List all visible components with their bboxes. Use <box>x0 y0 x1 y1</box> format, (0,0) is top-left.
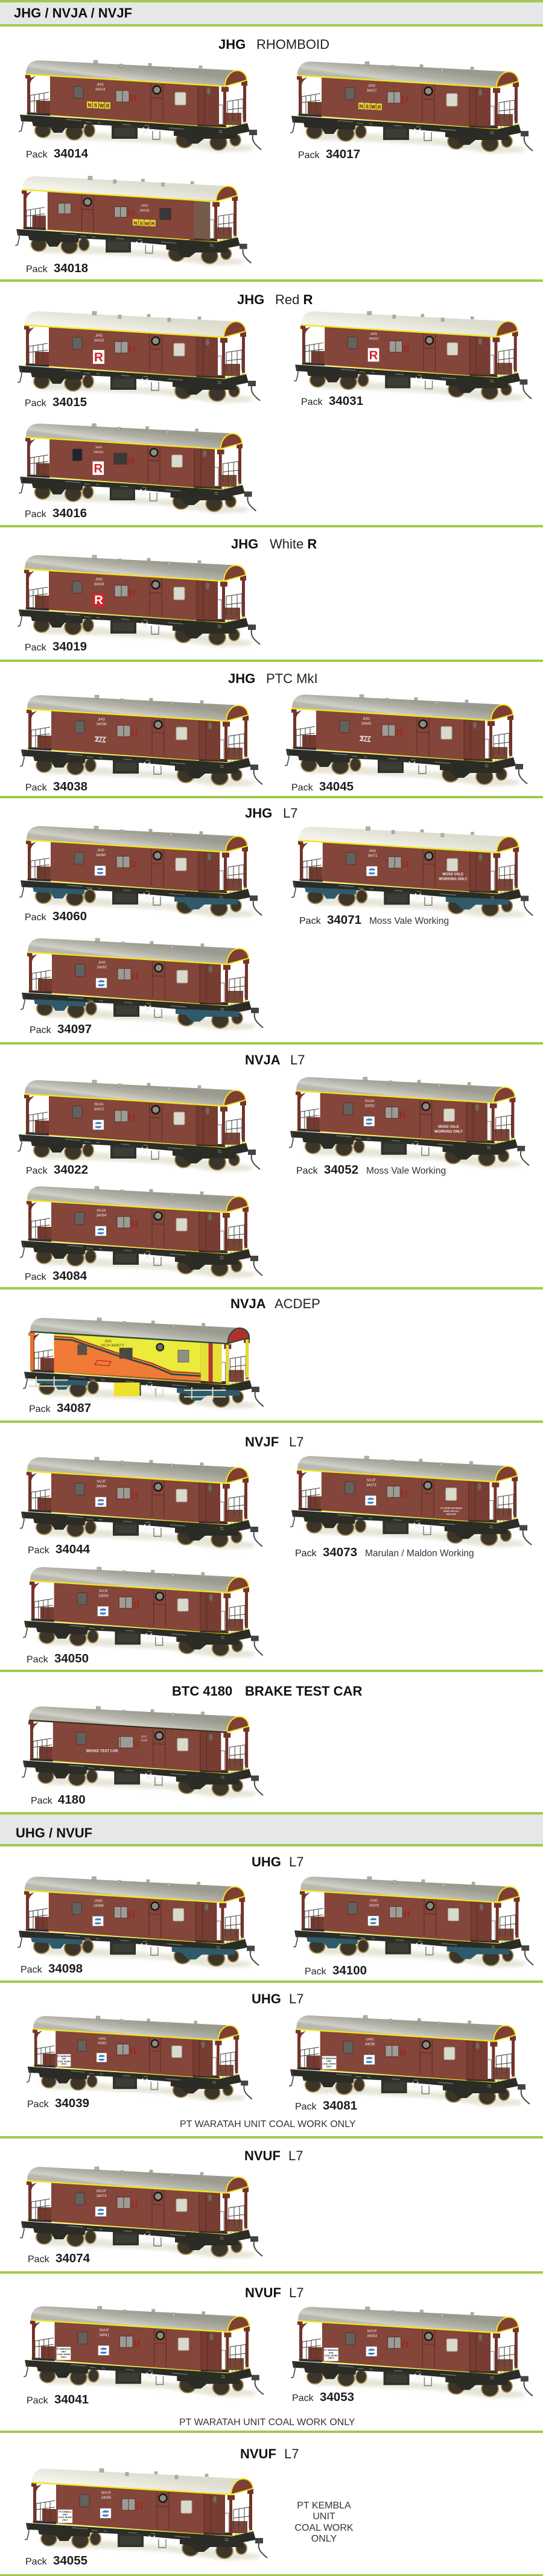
wagon 34074 <box>20 2167 262 2259</box>
pack label 34014: Pack <box>26 150 48 160</box>
pack label 34087: Pack <box>29 1404 51 1414</box>
pack label 34081: 34081 <box>323 2099 357 2113</box>
heading: JHG White R: White <box>270 536 307 552</box>
header band: JHG / NVJA / NVJF: JHG / NVJA / NVJF <box>14 5 132 21</box>
wagon 34031: JHG <box>370 332 378 336</box>
pack label 34071: 34071 <box>327 913 361 927</box>
heading: JHG RHOMBOID: RHOMBOID <box>256 37 329 52</box>
wagon 34041 <box>24 2306 264 2397</box>
header band: UHG / NVUF: UHG / NVUF <box>16 1825 92 1840</box>
wagon 34038 <box>20 695 262 787</box>
heading: JHG White R: JHG <box>231 536 258 552</box>
wagon 34055: 34055 <box>101 2496 112 2500</box>
wagon 34041: UNIT <box>61 2351 66 2353</box>
wagon 34052: MOSS VALE <box>438 1125 459 1129</box>
wagon 34039: 34081 <box>98 2042 107 2046</box>
wagon 34014: JHG <box>97 83 104 87</box>
wagon 34039: COAL WORK <box>58 2060 71 2062</box>
wagon 34087: NVJA 34087 F <box>101 1344 124 1348</box>
pack label 34074: 34074 <box>56 2251 91 2265</box>
wagon 34039: PT WARATAH <box>57 2055 71 2058</box>
wagon 34074: NVUF <box>97 2190 106 2193</box>
wagon 34018: R <box>151 221 155 226</box>
pack label 34015: Pack <box>25 398 46 409</box>
heading: NVUF L7: L7 <box>288 2148 303 2163</box>
pack label 34084: Pack <box>25 1272 46 1282</box>
wagon 34100: 34100 <box>369 1904 379 1907</box>
wagon 34017: JHG <box>368 84 375 88</box>
pack label 34044: Pack <box>28 1545 49 1556</box>
wagon 34074: 34074 <box>97 2195 107 2198</box>
pack label 34071: Pack <box>299 916 321 926</box>
wagon 34019: R <box>94 594 103 607</box>
pack label 34041: Pack <box>27 2396 48 2406</box>
wagon 34081: UHG <box>366 2038 374 2042</box>
wagon 34050: 34050 <box>98 1594 109 1598</box>
pack label 34052: Pack <box>296 1166 318 1176</box>
pack label 34038: 34038 <box>53 780 87 793</box>
wagon 34060: 34060 <box>96 854 106 857</box>
wagon 34017: W <box>371 104 376 110</box>
heading: NVJF L7: L7 <box>289 1434 303 1449</box>
wagon 34039: ONLY <box>62 2062 67 2065</box>
wagon 34055 <box>25 2469 267 2560</box>
wagon 34084: NVJA <box>97 1209 106 1213</box>
wagon 34039: UNIT <box>62 2058 66 2060</box>
wagon 34014: W <box>100 103 104 109</box>
wagon 34071 <box>291 827 533 918</box>
wagon 34098: UHG <box>95 1900 103 1903</box>
wagon 34081: 34039 <box>365 2043 375 2047</box>
wagon 34060: JHG <box>97 849 104 853</box>
pack label 34039: 34039 <box>55 2096 89 2110</box>
pack label 4180: 4180 <box>58 1793 86 1807</box>
wagon 34016: JHG <box>95 446 103 450</box>
heading: NVJA L7: NVJA <box>245 1052 281 1067</box>
wagon 34081 <box>289 2015 530 2107</box>
heading: UHG L7: UHG <box>252 1854 281 1869</box>
wagon 34041: 34041 <box>99 2333 109 2337</box>
heading: UHG L7: L7 <box>289 1854 303 1869</box>
panel: JHG PTC MkI <box>20 671 527 793</box>
wagon 34084: 34084 <box>97 1214 107 1218</box>
panel: NVUF L7 Pt Waratah <box>24 2285 533 2428</box>
pack label 34100: 34100 <box>332 1964 367 1977</box>
wagon 34017: 34017 <box>367 89 377 93</box>
pack label 34015: 34015 <box>52 395 87 409</box>
wagon 4180 <box>22 1706 263 1798</box>
wagon 34052: NVJA <box>365 1100 374 1104</box>
heading: NVUF L7: NVUF <box>240 2446 276 2461</box>
wagon 34053 <box>291 2307 533 2399</box>
wagon 34098 <box>17 1877 259 1968</box>
heading: NVJA ACDEP: ACDEP <box>275 1296 320 1311</box>
wagon 34014: N <box>88 103 92 108</box>
wagon 34060 <box>19 826 262 918</box>
panel: NVUF L7 <box>20 2148 303 2265</box>
panel: NVJA L7 <box>17 1052 529 1283</box>
wagon 34052: 34052 <box>365 1104 375 1108</box>
heading: UHG L7: L7 <box>289 1991 303 2006</box>
wagon 34045: 34045 <box>361 722 372 726</box>
pack label 34019: Pack <box>25 643 46 653</box>
wagon 34055: ONLY <box>62 2519 68 2521</box>
panel: NVJF L7 <box>20 1434 532 1665</box>
note: PT Kembla unit coal work only: PT KEMBLA <box>297 2501 351 2511</box>
wagon 34055: COAL WORK <box>59 2516 72 2519</box>
heading: JHG Red R: JHG <box>237 292 264 307</box>
panel: JHG Red R <box>17 292 532 520</box>
pack label 34018: 34018 <box>54 261 88 275</box>
wagon 34014: S <box>94 103 98 109</box>
note: PT Kembla unit coal work only: UNIT <box>313 2511 335 2522</box>
wagon 34073: MARULAN and <box>443 1510 459 1513</box>
pack label 34055: 34055 <box>53 2554 87 2568</box>
wagon 34015: JHG <box>95 334 103 338</box>
wagon 34071: 34071 <box>367 854 378 858</box>
heading: JHG White R: R <box>307 536 317 552</box>
wagon 34041: COAL WORK <box>57 2353 71 2356</box>
heading: JHG PTC MkI: JHG <box>228 671 255 686</box>
heading: JHG Red R: R <box>303 292 313 307</box>
pack label 34053: 34053 <box>320 2390 354 2404</box>
note: PT Waratah unit coal work only: PT WARATAH UNIT COAL WORK ONLY <box>180 2119 356 2129</box>
wagon 34015: 34015 <box>94 339 104 343</box>
note: PT Kembla unit coal work only: ONLY <box>311 2534 337 2544</box>
wagon 34044: NVJF <box>97 1480 106 1484</box>
heading: NVUF L7: NVUF <box>244 2148 281 2163</box>
heading: JHG RHOMBOID: JHG <box>218 37 246 52</box>
pack label 34022: Pack <box>26 1166 48 1176</box>
panel: UHG L7 blue bogies <box>17 1854 533 1977</box>
pack label 34031: 34031 <box>329 394 363 408</box>
heading: JHG L7: JHG <box>245 806 272 821</box>
wagon 34055: UNIT <box>63 2514 68 2516</box>
heading: UHG L7: UHG <box>252 1991 281 2006</box>
wagon 34081: ONLY <box>326 2066 332 2068</box>
pack label 34087: 34087 <box>57 1401 91 1415</box>
pack label 34050: Pack <box>27 1655 48 1665</box>
note: PT Waratah unit coal work only: PT WARATAH UNIT COAL WORK ONLY <box>179 2417 355 2428</box>
wagon 34018: N <box>133 220 137 226</box>
wagon 34018: 34018 <box>139 209 149 212</box>
heading: BTC 4180 BRAKE TEST CAR: BRAKE TEST CAR <box>245 1684 362 1699</box>
wagon 34018: W <box>145 221 150 226</box>
pack label 34074: Pack <box>28 2254 49 2265</box>
pack label 34045: Pack <box>291 783 313 793</box>
wagon 34071: WORKING ONLY <box>439 878 467 882</box>
wagon 34016 <box>19 424 256 514</box>
wagon 34084 <box>20 1186 262 1278</box>
wagon 34097: 34097 <box>97 966 107 970</box>
wagon 34044 <box>20 1457 262 1549</box>
wagon 34015 <box>17 311 260 403</box>
wagon 34087 <box>23 1318 264 1409</box>
pack label 34014: 34014 <box>54 147 89 161</box>
panel: NVUF L7 Pt Kembla <box>25 2446 354 2568</box>
heading: NVJA L7: L7 <box>290 1052 305 1067</box>
pack label 34100: Pack <box>305 1967 326 1977</box>
pack label 34098: 34098 <box>48 1962 83 1976</box>
heading: NVUF L7: L7 <box>284 2446 299 2461</box>
wagon 34053: COAL WORK <box>325 2355 338 2357</box>
wagon 34017 <box>290 62 533 153</box>
wagon 34017: S <box>366 104 369 110</box>
pack label 34031: Pack <box>301 397 323 407</box>
wagon 34031: 34031 <box>369 337 379 341</box>
wagon 34053: UNIT <box>329 2352 334 2354</box>
heading: NVUF L7: NVUF <box>245 2285 281 2300</box>
wagon 34017: N <box>360 104 363 109</box>
wagon 34016: R <box>94 462 103 475</box>
wagon 34022 <box>17 1080 260 1172</box>
wagon 34041: ONLY <box>61 2356 67 2359</box>
wagon 34050 <box>23 1567 263 1658</box>
wagon 34097: JHG <box>98 961 106 965</box>
pack label 34045: 34045 <box>319 780 354 793</box>
panel: NVJA ACDEP <box>23 1296 320 1415</box>
wagon 34019: JHG <box>95 578 103 582</box>
heading: JHG PTC MkI: PTC MkI <box>266 671 318 686</box>
panel: UHG L7 Pt Waratah <box>27 1991 530 2129</box>
pack label 34016: 34016 <box>52 506 87 520</box>
wagon 34097 <box>21 938 263 1030</box>
wagon 34053: 34053 <box>367 2335 378 2338</box>
heading: BTC 4180 BRAKE TEST CAR: BTC 4180 <box>172 1684 232 1699</box>
pack label 34016: Pack <box>25 509 46 520</box>
pack label 34039: Pack <box>27 2099 49 2110</box>
pack label 34022: 34022 <box>54 1163 88 1177</box>
header band: JHG / NVJA / NVJF <box>0 0 543 27</box>
heading: NVJF L7: NVJF <box>245 1434 279 1449</box>
wagon 34081: PT WARATAH <box>322 2057 337 2059</box>
pack label 34060: Pack <box>25 912 46 923</box>
pack label 34073: 34073 <box>323 1545 357 1559</box>
wagon 34073: NVJF <box>367 1479 376 1483</box>
header band: UHG / NVUF <box>0 1812 543 1846</box>
wagon 4180: BRAKE TEST CAR <box>86 1750 118 1754</box>
wagon 34039 <box>27 2016 252 2101</box>
panel: JHG RHOMBOID <box>15 37 533 275</box>
pack label 34073: Pack <box>295 1548 317 1559</box>
wagon 34053: PT WARATAH <box>324 2349 338 2352</box>
pack label 34060: 34060 <box>52 909 87 923</box>
note: Moss Vale Working: Moss Vale Working <box>366 1166 446 1176</box>
heading: JHG Red R: Red <box>275 292 303 307</box>
wagon 34019 <box>17 555 260 647</box>
note: PT Kembla unit coal work only: COAL WORK <box>294 2523 354 2533</box>
pack label 34017: Pack <box>298 150 320 161</box>
wagon 34014 <box>19 60 261 152</box>
wagon 34014: R <box>106 104 110 109</box>
wagon 34052: WORKING ONLY <box>434 1130 463 1134</box>
wagon 34081: UNIT <box>326 2060 332 2062</box>
pack label 34044: 34044 <box>56 1542 91 1556</box>
wagon 34053: NVUF <box>367 2330 377 2333</box>
pack label 34055: Pack <box>25 2557 47 2567</box>
wagon 34031 <box>294 311 532 401</box>
pack label 34097: Pack <box>30 1025 51 1035</box>
panel: JHG L7 <box>19 806 533 1036</box>
wagon 34071: MOSS VALE <box>442 873 463 877</box>
heading: JHG L7: L7 <box>283 806 297 821</box>
wagon 34073: 34073 <box>366 1484 376 1487</box>
wagon 34098: 34098 <box>94 1904 104 1908</box>
note: Moss Vale Working: Moss Vale Working <box>369 916 449 926</box>
note: Marulan / Maldon Working: Marulan / Maldon Working <box>365 1548 474 1559</box>
wagon 34014: 34014 <box>95 88 106 92</box>
heading: NVJA ACDEP: NVJA <box>230 1296 266 1311</box>
pack label 34098: Pack <box>21 1965 42 1975</box>
pack label 34019: 34019 <box>52 640 87 654</box>
wagon 34041: PT WARATAH <box>57 2348 71 2350</box>
wagon 34073: MALDON <box>446 1513 456 1516</box>
pack label 4180: Pack <box>31 1796 52 1806</box>
wagon 34050: NVJF <box>99 1590 108 1594</box>
wagon 34018: JHG <box>141 205 148 208</box>
wagon 34015: R <box>94 351 103 364</box>
wagon 34016: 34016 <box>94 451 103 454</box>
heading: NVUF L7: L7 <box>289 2285 303 2300</box>
wagon 34018 <box>15 176 251 266</box>
wagon 34053: ONLY <box>328 2357 334 2359</box>
pack label 34041: 34041 <box>54 2393 89 2406</box>
wagon 34081: COAL WORK <box>322 2062 336 2065</box>
pack label 34017: 34017 <box>326 147 360 161</box>
panel: JHG White R <box>17 536 317 654</box>
wagon 34019: 34019 <box>94 583 104 587</box>
wagon 34045 <box>285 695 527 786</box>
wagon 34044: 34044 <box>97 1485 107 1489</box>
pack label 34081: Pack <box>295 2102 317 2112</box>
wagon 34073 <box>290 1456 532 1547</box>
panel: BTC 4180 Brake Test Car <box>22 1684 362 1807</box>
pack label 34084: 34084 <box>52 1269 87 1283</box>
wagon 34045: JHG <box>363 717 370 721</box>
pack label 34053: Pack <box>292 2393 314 2403</box>
wagon 34022: NVJA <box>94 1103 104 1107</box>
wagon 34038: JHG <box>98 718 105 722</box>
pack label 34050: 34050 <box>54 1652 89 1665</box>
wagon 4180: BTC <box>141 1735 147 1739</box>
wagon 34031: R <box>369 348 378 362</box>
pack label 34097: 34097 <box>57 1022 92 1036</box>
wagon 34087: JHG <box>104 1340 112 1344</box>
wagon 34100: UHG <box>370 1900 378 1903</box>
wagon 34052 <box>289 1077 529 1168</box>
wagon 34017: R <box>378 105 381 110</box>
wagon 34018: S <box>139 220 143 226</box>
pack label 34018: Pack <box>26 264 48 275</box>
wagon 4180: 4180 <box>141 1739 148 1743</box>
pack label 34052: 34052 <box>324 1163 358 1177</box>
wagon 34055: NVUF <box>101 2492 111 2495</box>
wagon 34041: NVUF <box>100 2329 109 2333</box>
wagon 34038: 34038 <box>97 723 107 727</box>
wagon 34100 <box>293 1877 533 1967</box>
wagon 34071: JHG <box>369 850 376 853</box>
wagon 34073: TO WORK BETWEEN <box>440 1507 462 1510</box>
wagon 34022: 34022 <box>94 1108 104 1111</box>
wagon 34055: PT KEMBLA <box>59 2511 72 2513</box>
pack label 34038: Pack <box>25 783 47 793</box>
wagon 34039: UHG <box>98 2037 106 2041</box>
